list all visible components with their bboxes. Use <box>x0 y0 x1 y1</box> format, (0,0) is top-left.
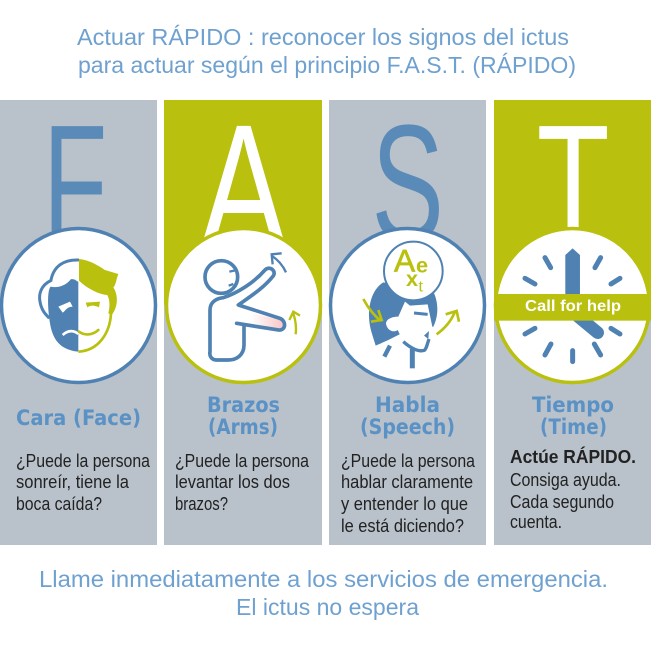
letter F: F <box>43 90 107 277</box>
panel: S - habla <box>329 90 486 545</box>
text: habla question: ¿Puede la persona <box>341 451 476 471</box>
text: habla question <box>341 451 476 536</box>
circle: clock <box>496 228 650 382</box>
heading: Tiempo (Time): (Time) <box>540 415 607 439</box>
heading: Tiempo (Time): Tiempo <box>532 393 614 417</box>
title: Actuar RÁPIDO : reconocer los signos del ictus <box>77 24 569 50</box>
letter S: S <box>372 90 444 277</box>
text: brazos question: levantar los dos <box>175 472 290 492</box>
circle: face <box>2 228 156 382</box>
text: tiempo action <box>510 446 636 532</box>
icon: clock <box>494 248 651 362</box>
panel: A - brazos <box>164 88 322 545</box>
icon: head with letters bubble: A <box>394 243 416 279</box>
circle: arms <box>166 228 320 382</box>
icon: head with letters bubble: x <box>406 266 418 291</box>
banner text: Call for help: Call for help <box>525 298 621 315</box>
text: cara question: ¿Puede la persona <box>16 451 151 471</box>
text: habla question: le está diciendo? <box>341 516 464 536</box>
heading: Habla (Speech) <box>360 393 455 439</box>
heading: Tiempo (Time) <box>532 393 614 439</box>
heading: Brazos (Arms): Brazos <box>207 393 280 417</box>
icon: head with letters bubble: t <box>418 276 423 296</box>
panel: F - cara <box>0 90 157 545</box>
letter A: A <box>200 88 286 288</box>
text: tiempo action: cuenta. <box>510 512 562 532</box>
letter T: T <box>537 90 610 277</box>
footer message: Llame inmediatamente a los servicios de emergencia. <box>39 566 608 592</box>
circle: speech <box>330 228 484 382</box>
icon: head with letters bubble: e <box>416 253 428 278</box>
icon: head with letters bubble <box>363 242 459 368</box>
text: brazos question <box>175 451 310 514</box>
icon: half sad half happy face <box>40 259 118 352</box>
title: para actuar según el principio F.A.S.T. (RÁPIDO) <box>78 52 576 78</box>
text: cara question: sonreír, tiene la <box>16 472 130 492</box>
text: tiempo action: Cada segundo <box>510 492 614 512</box>
text: cara question <box>16 451 151 514</box>
footer message: El ictus no espera <box>236 594 419 620</box>
text: tiempo action: Consiga ayuda. <box>510 470 621 490</box>
heading: Habla (Speech): (Speech) <box>360 415 455 439</box>
heading: Brazos (Arms): (Arms) <box>208 415 278 439</box>
heading: Cara (Face): Cara (Face) <box>16 406 141 430</box>
text: habla question: y entender lo que <box>341 494 468 514</box>
heading: Habla (Speech): Habla <box>375 393 440 417</box>
footer message <box>39 566 608 620</box>
panel: T - tiempo <box>494 90 651 545</box>
icon: person raising arms <box>205 253 300 360</box>
text: tiempo action: Actúe RÁPIDO. <box>510 446 636 467</box>
heading: Brazos (Arms) <box>207 393 280 439</box>
text: brazos question: ¿Puede la persona <box>175 451 310 471</box>
text: brazos question: brazos? <box>175 494 228 514</box>
title <box>77 24 576 78</box>
text: cara question: boca caída? <box>16 494 102 514</box>
text: habla question: hablar claramente <box>341 472 473 492</box>
